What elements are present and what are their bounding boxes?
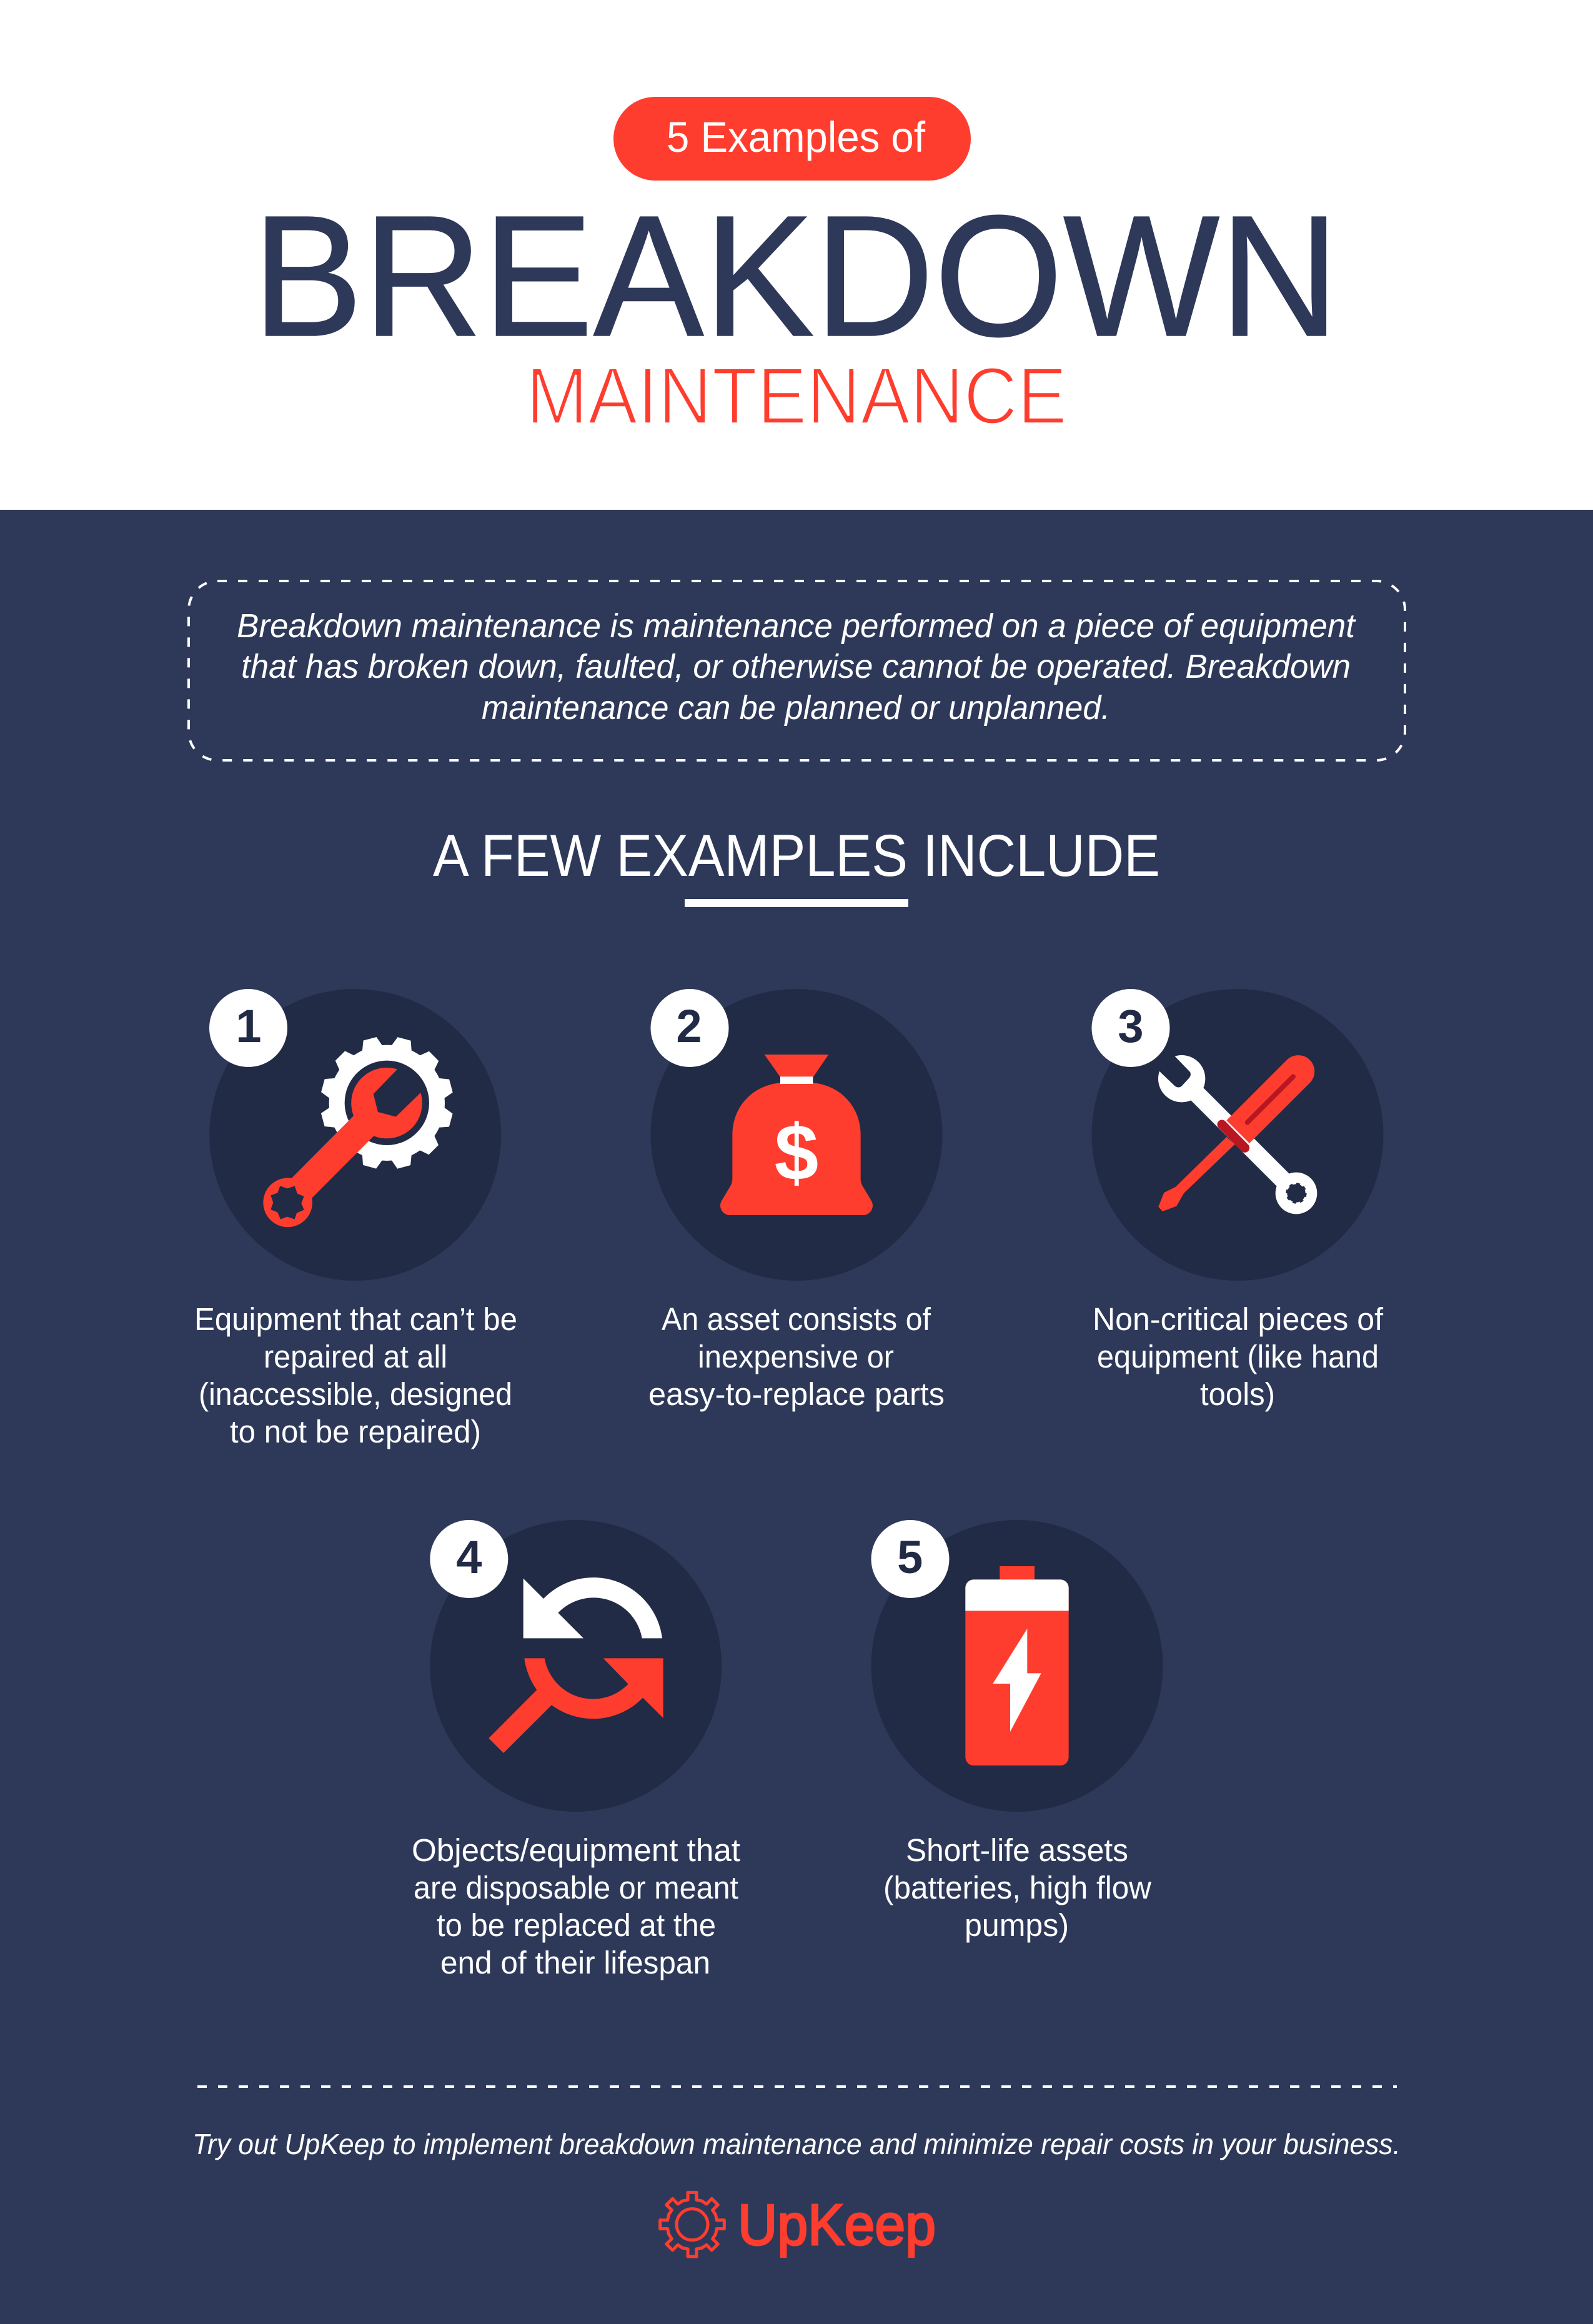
section heading: A few examples include: A FEW EXAMPLES INCLUDE [433, 823, 1160, 889]
caption: example 1: (inaccessible, designed [199, 1376, 512, 1412]
definition callout box: that has broken down, faulted, or otherwise cannot be operated. Breakdown [241, 648, 1351, 685]
logo: UpKeep [660, 2192, 936, 2257]
header pill: 5 Examples of [613, 97, 971, 181]
caption: example 2: easy-to-replace parts [648, 1376, 945, 1412]
caption: example 5: Short-life assets [906, 1832, 1128, 1868]
subtitle: MAINTENANCE: MAINTENANCE [526, 351, 1067, 441]
header pill: 5 Examples of: 5 Examples of [667, 113, 926, 161]
badge: number 4: 4 [456, 1531, 482, 1583]
caption: example 3: equipment (like hand [1097, 1339, 1379, 1374]
badge: number 1: 1 [236, 1000, 262, 1052]
badge: number 2 [651, 989, 728, 1067]
example 2: inexpensive parts [648, 989, 945, 1412]
badge: number 5: 5 [897, 1531, 923, 1583]
caption: example 2 [648, 1301, 945, 1412]
caption: example 3: Non-critical pieces of [1093, 1301, 1384, 1337]
caption: example 5 [883, 1832, 1151, 1943]
caption: example 2: An asset consists of [662, 1301, 931, 1337]
caption: example 2: inexpensive or [698, 1339, 894, 1374]
caption: example 1 [194, 1301, 517, 1449]
badge: number 4 [430, 1520, 508, 1598]
example 1: equipment that cannot be repaired [194, 989, 517, 1449]
caption: example 3 [1093, 1301, 1384, 1412]
badge: number 5 [871, 1520, 950, 1598]
caption: example 3: tools) [1200, 1376, 1275, 1412]
footer call to action: Try out UpKeep to implement breakdown maintenance and minimize repair costs in your business. [192, 2128, 1401, 2160]
badge: number 3 [1092, 989, 1169, 1067]
caption: example 5: (batteries, high flow [883, 1870, 1151, 1905]
definition callout box: maintenance can be planned or unplanned. [482, 689, 1110, 727]
icon: replace arrows [489, 1577, 663, 1753]
caption: example 4 [412, 1832, 740, 1980]
badge: number 2: 2 [676, 1000, 702, 1052]
definition callout box [189, 581, 1405, 760]
icon: logo gear [660, 2192, 724, 2257]
badge: number 1 [209, 989, 287, 1067]
badge: number 3: 3 [1118, 1000, 1144, 1052]
caption: example 4: end of their lifespan [440, 1945, 710, 1980]
example 4: disposable objects [412, 1520, 740, 1980]
definition callout box: Breakdown maintenance is maintenance performed on a piece of equipment [237, 607, 1356, 645]
panel: navy background [0, 510, 1593, 2324]
caption: example 1: to not be repaired) [230, 1414, 481, 1449]
caption: example 1: Equipment that can’t be [194, 1301, 517, 1337]
example 3: hand tools [1092, 989, 1384, 1412]
icon: gear and wrench [263, 1033, 456, 1227]
caption: example 4: Objects/equipment that [412, 1832, 740, 1868]
icon: battery [965, 1566, 1069, 1765]
caption: example 5: pumps) [965, 1907, 1069, 1943]
example 5: short-life assets [871, 1520, 1163, 1943]
caption: example 4: to be replaced at the [437, 1907, 716, 1943]
title: BREAKDOWN: BREAKDOWN [252, 180, 1339, 372]
caption: example 4: are disposable or meant [414, 1870, 738, 1905]
icon: crossed wrench and screwdriver [1158, 1051, 1317, 1214]
caption: example 1: repaired at all [264, 1339, 447, 1374]
icon: money bag [720, 1055, 873, 1215]
icon: money bag: $ [775, 1108, 818, 1196]
logo wordmark: UpKeep [738, 2192, 936, 2257]
